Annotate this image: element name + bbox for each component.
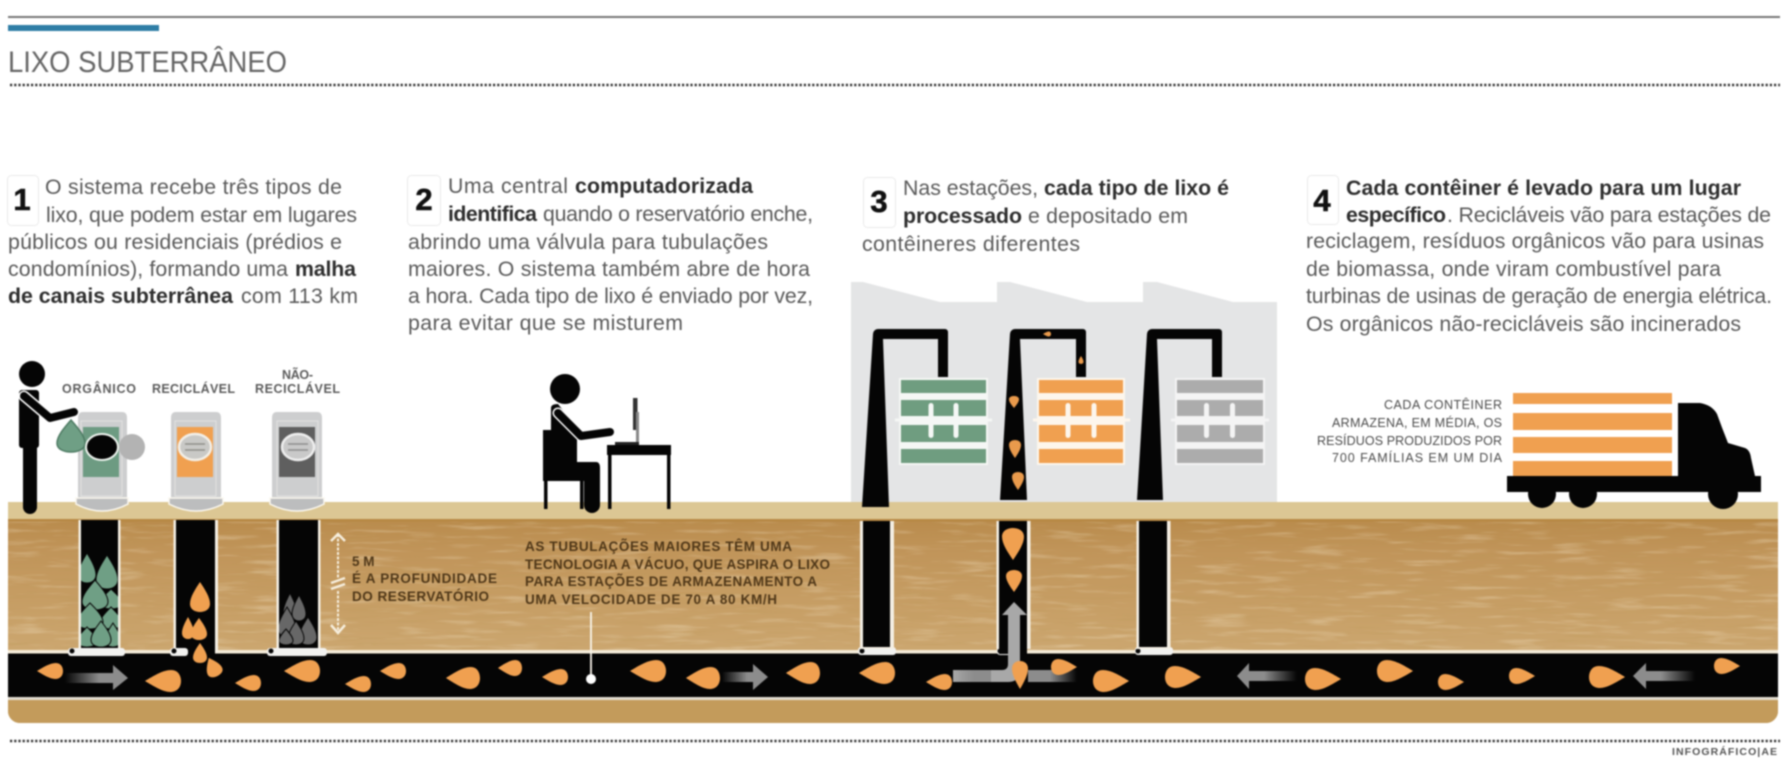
step 1 text xyxy=(8,175,358,308)
drops in station pipe xyxy=(1002,332,1084,592)
factory building xyxy=(851,282,1277,502)
step 3 text: 3 xyxy=(870,184,888,219)
step 1 text: públicos ou residenciais (prédios e xyxy=(8,230,342,254)
truck note: CADA CONTÊINER xyxy=(1384,397,1502,412)
person at computer xyxy=(543,374,671,513)
depth label: 5 M xyxy=(352,554,375,569)
valve plates xyxy=(68,647,1173,656)
depth label: DO RESERVATÓRIO xyxy=(352,589,489,604)
step 3 text xyxy=(862,176,1229,256)
step 2 text: abrindo uma válvula para tubulações xyxy=(408,230,768,254)
depth label: É A PROFUNDIDADE xyxy=(352,571,497,586)
depth label xyxy=(352,554,497,604)
step 3 text: cada tipo de lixo é xyxy=(1044,176,1229,200)
step 4 text: turbinas de usinas de geração de energia elétrica. xyxy=(1306,284,1772,308)
bin labels: ORGÂNICO xyxy=(62,381,136,396)
waste drops in main pipe xyxy=(37,658,1740,692)
step 2 text xyxy=(408,174,813,335)
truck note xyxy=(1317,397,1503,465)
bin labels: RECICLÁVEL xyxy=(255,381,340,396)
step 3 text: Nas estações, xyxy=(903,176,1038,200)
step 1 text: malha xyxy=(295,257,356,281)
step 1 text: de canais subterrânea xyxy=(8,284,233,308)
vacuum pipes note: TECNOLOGIA A VÁCUO, QUE ASPIRA O LIXO xyxy=(525,557,830,572)
container: orange xyxy=(1033,378,1130,465)
shaft: reciclável xyxy=(174,520,224,679)
step 2 text: quando o reservatório enche, xyxy=(543,202,813,226)
step 4 text: 4 xyxy=(1313,183,1331,218)
ground cross-section xyxy=(8,502,1778,723)
step 2 text: para evitar que se misturem xyxy=(408,311,683,335)
truck note: 700 FAMÍLIAS EM UM DIA xyxy=(1332,450,1503,465)
step 1 text: com 113 km xyxy=(241,284,358,308)
bin: reciclável xyxy=(169,412,223,511)
main underground pipe xyxy=(8,650,1778,700)
bin: orgânico xyxy=(76,412,128,511)
title: LIXO SUBTERRÂNEO xyxy=(8,46,287,79)
step 2 text: identifica xyxy=(448,202,537,226)
step 1 text: lixo, que podem estar em lugares xyxy=(46,203,357,227)
shaft: orgânico xyxy=(77,520,122,652)
step 2 text: computadorizada xyxy=(575,174,753,198)
bin labels: NÃO- xyxy=(282,367,313,382)
truck xyxy=(1507,393,1761,509)
bin: não-reciclável xyxy=(270,412,324,511)
bin labels xyxy=(62,367,340,396)
container: green xyxy=(895,378,992,465)
station pipes above ground xyxy=(862,329,1222,507)
step 4 text: Cada contêiner é levado para um lugar xyxy=(1346,176,1741,200)
step 2 text: a hora. Cada tipo de lixo é enviado por vez, xyxy=(408,284,813,308)
step 4 text: específico xyxy=(1346,203,1446,227)
header xyxy=(8,16,1780,85)
vacuum pipes note: AS TUBULAÇÕES MAIORES TÊM UMA xyxy=(525,539,792,554)
step 4 text: . Recicláveis vão para estações de xyxy=(1447,203,1771,227)
vacuum pipes note: PARA ESTAÇÕES DE ARMAZENAMENTO A xyxy=(525,574,817,589)
step 1 text: O sistema recebe três tipos de xyxy=(45,175,342,199)
step 4 text xyxy=(1306,176,1772,336)
step 3 text: processado xyxy=(903,204,1022,228)
person throwing bag xyxy=(19,361,145,514)
step 3 text: e depositado em xyxy=(1028,204,1188,228)
container: grey xyxy=(1171,378,1269,465)
step 4 text: de biomassa, onde viram combustível para xyxy=(1306,257,1721,281)
depth arrow xyxy=(331,534,345,633)
step 2 text: Uma central xyxy=(448,174,568,198)
truck note: ARMAZENA, EM MÉDIA, OS xyxy=(1332,415,1502,430)
truck note: RESÍDUOS PRODUZIDOS POR xyxy=(1317,433,1502,448)
step 1 text: condomínios), formando uma xyxy=(8,257,288,281)
credit: INFOGRÁFICO|AE xyxy=(1672,745,1777,758)
leader line xyxy=(586,612,596,684)
step 4 text: reciclagem, resíduos orgânicos vão para usinas xyxy=(1306,229,1764,253)
station shafts xyxy=(860,521,1170,654)
step 4 text: Os orgânicos não-recicláveis são incinerados xyxy=(1306,312,1741,336)
step 3 text: contêineres diferentes xyxy=(862,232,1080,256)
shaft: não-reciclável xyxy=(276,520,320,652)
flow arrows xyxy=(65,602,1695,690)
vacuum pipes note: UMA VELOCIDADE DE 70 A 80 KM/H xyxy=(525,592,777,607)
step 2 text: maiores. O sistema também abre de hora xyxy=(408,257,810,281)
bin labels: RECICLÁVEL xyxy=(152,381,235,396)
vacuum pipes note xyxy=(525,539,830,607)
step 1 text: 1 xyxy=(13,182,31,217)
step 2 text: 2 xyxy=(415,182,433,217)
